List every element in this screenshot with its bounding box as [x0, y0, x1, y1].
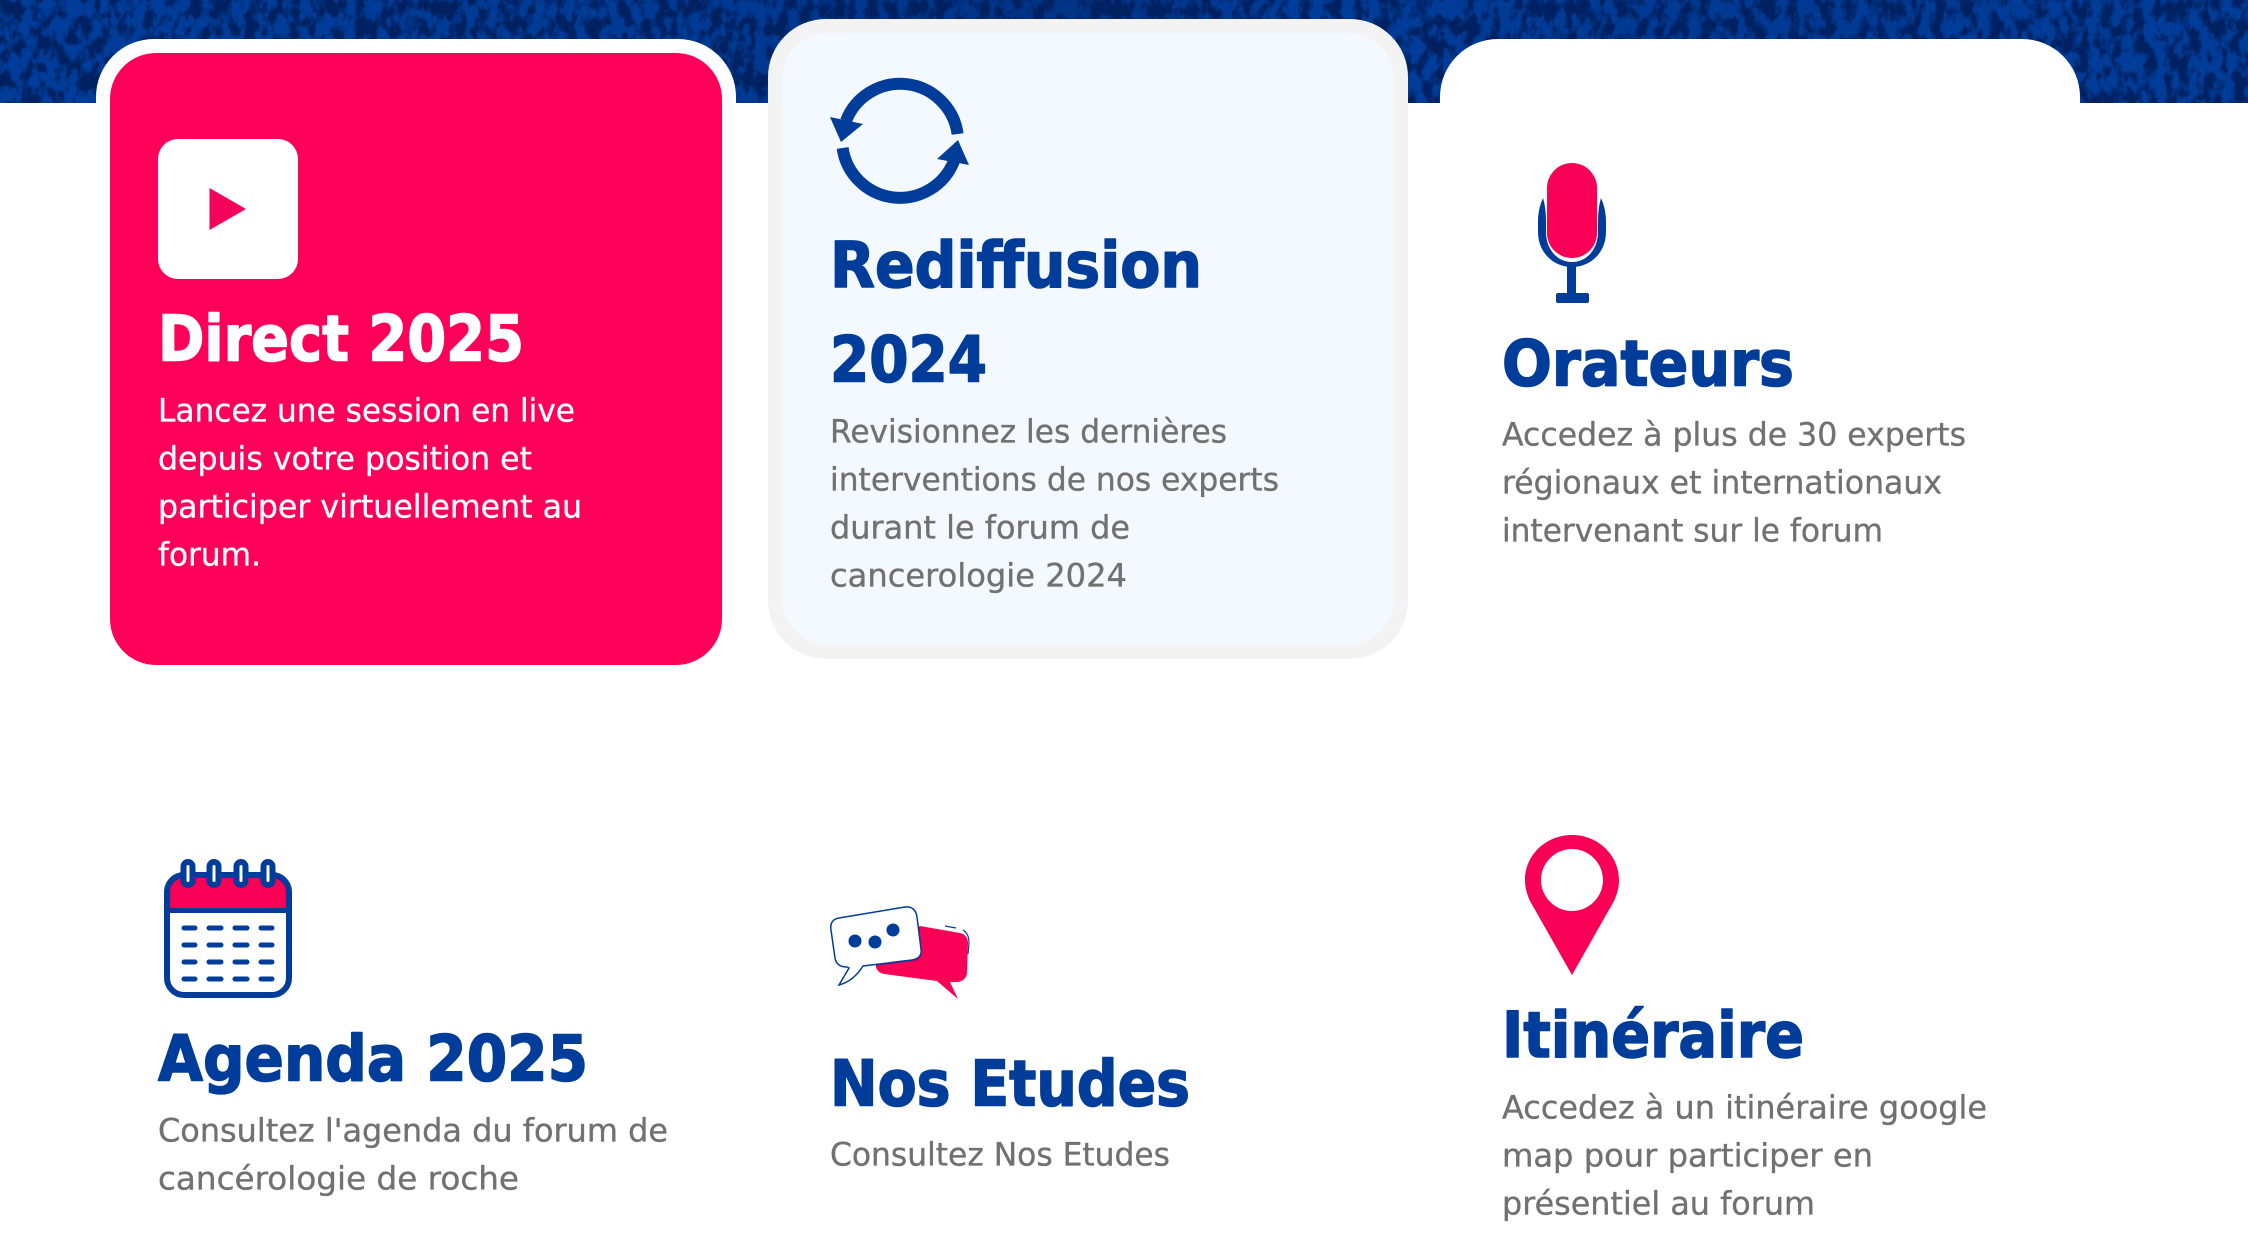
heading: Rediffusion 2024: Rediffusion — [830, 229, 1202, 302]
text: Itinéraire description: map pour participer en — [1502, 1136, 1873, 1174]
text: Nos Etudes description: Consultez Nos Etudes — [830, 1136, 1170, 1174]
text: Orateurs description: intervenant sur le forum — [1502, 512, 1883, 550]
text: Agenda description: Consultez l'agenda du forum de — [158, 1112, 668, 1150]
icon: chat bubbles — [831, 907, 969, 999]
heading: Orateurs: Orateurs — [1502, 328, 1794, 400]
text: Direct description — [158, 392, 582, 574]
panel: Rediffusion 2024 — [768, 19, 1408, 659]
text: Itinéraire description — [1502, 1088, 1987, 1222]
text: Rediffusion description: Revisionnez les dernières — [830, 412, 1227, 450]
text: Rediffusion description — [830, 412, 1279, 594]
text: Agenda description: cancérologie de roche — [158, 1160, 519, 1198]
header band: textured blue — [0, 0, 2248, 103]
icon: map pin — [1525, 835, 1619, 975]
heading: Itinéraire: Itinéraire — [1502, 999, 1804, 1072]
panel: Agenda 2025 — [158, 862, 668, 1198]
text: Direct description: depuis votre position et — [158, 440, 532, 478]
text: Agenda description — [158, 1112, 668, 1198]
text: Rediffusion description: cancerologie 2024 — [830, 556, 1127, 594]
icon: microphone — [1538, 163, 1606, 303]
text: Direct description: Lancez une session en live — [158, 392, 575, 430]
panel: Itinéraire — [1502, 835, 1987, 1222]
text: Direct description: forum. — [158, 536, 261, 574]
text: Orateurs description: régionaux et internationaux — [1502, 464, 1942, 502]
icon: play button — [158, 139, 298, 279]
icon: calendar — [165, 862, 291, 995]
icon: refresh arrows — [830, 84, 969, 198]
heading: Rediffusion 2024 — [830, 229, 1202, 396]
heading: Agenda 2025: Agenda 2025 — [158, 1022, 588, 1096]
text: Orateurs description: Accedez à plus de 30 experts — [1502, 416, 1966, 454]
text: Direct description: participer virtuellement au — [158, 488, 582, 526]
panel: Orateurs — [1440, 39, 2080, 679]
text: Itinéraire description: présentiel au forum — [1502, 1184, 1815, 1222]
heading: Rediffusion 2024: 2024 — [830, 324, 987, 396]
panel: Nos Etudes — [830, 907, 1190, 1174]
heading: Direct 2025: Direct 2025 — [158, 302, 524, 376]
text: Rediffusion description: durant le forum de — [830, 508, 1130, 546]
text: Orateurs description — [1502, 416, 1966, 550]
text: Itinéraire description: Accedez à un itinéraire google — [1502, 1088, 1987, 1126]
heading: Nos Etudes: Nos Etudes — [830, 1048, 1190, 1120]
text: Rediffusion description: interventions de nos experts — [830, 460, 1279, 498]
panel: Direct 2025 — [96, 39, 736, 679]
